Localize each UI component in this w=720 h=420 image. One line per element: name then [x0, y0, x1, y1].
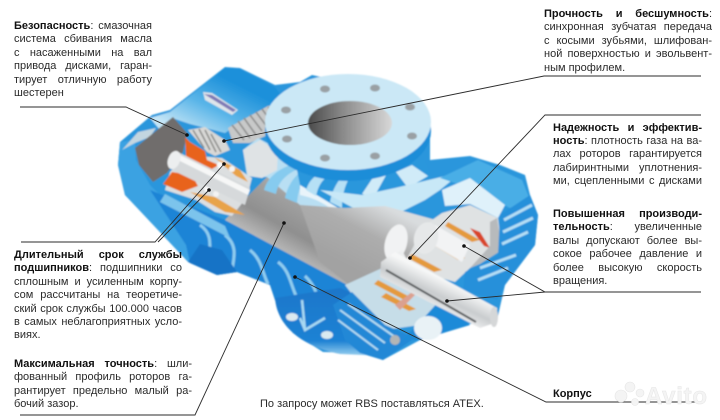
text: productivity: вращения. [553, 275, 607, 287]
text: reliability: ми, сцепленными с дисками [553, 175, 702, 187]
top flange face [265, 74, 431, 170]
text: safety [14, 20, 152, 99]
flange bolts [281, 84, 417, 162]
output shaft [380, 252, 498, 328]
rotor end caps [380, 219, 442, 276]
text: bearing life: в самых неблагоприятных усло- [14, 316, 182, 328]
text: maximum precision [14, 358, 192, 410]
watermark: Avito: Avito [645, 383, 707, 410]
text: bearing life [14, 249, 182, 341]
text: strength and silence: ной поверхностью и эвольвент- [544, 48, 712, 60]
left shaft [165, 149, 250, 205]
text: strength and silence: ным профилем. [544, 62, 625, 74]
text: reliability: лабиринтными уплотнения- [553, 162, 702, 174]
text: bearing life: сплошным и усиленным корпу- [14, 276, 182, 288]
text: bearing life: сом рассчитаны на теоретиче- [14, 289, 182, 301]
text: housing label: Корпус [553, 388, 592, 400]
text: productivity: более высокую скорость [553, 262, 702, 274]
text: strength and silence: синхронная зубчатая передача [544, 21, 712, 33]
text: reliability [553, 122, 702, 187]
left end gray wall [135, 117, 187, 182]
right fins [463, 195, 538, 300]
flange ribs [295, 160, 433, 212]
text: maximum precision: Максимальная точность: шли- [14, 358, 192, 370]
second rotor cylinder [300, 205, 443, 288]
text: maximum precision: бочий зазор. [14, 398, 79, 410]
text: strength and silence [544, 8, 712, 74]
text: safety: тирует отличную работу [14, 74, 152, 86]
lower front block [333, 292, 415, 360]
left end blue rim [118, 140, 240, 262]
lower left housing ribs [150, 190, 375, 350]
text: productivity: Повышенная производи- [553, 208, 702, 220]
text: reliability: ность: плотность газа на ва- [553, 135, 702, 147]
text: safety: привода дисками, гаран- [14, 60, 152, 72]
text: footnote: По запросу может RBS поставляться ATEX. [260, 398, 484, 410]
right bearing cavity [405, 205, 502, 282]
text: productivity: сокое рабочее давление и [553, 248, 702, 260]
text: maximum precision: рантирует предельно малый ра- [14, 385, 192, 397]
text: reliability: Надежность и эффектив- [553, 122, 702, 134]
text: productivity [553, 208, 702, 287]
text: strength and silence: Прочность и бесшумность: [544, 8, 712, 20]
text: bearing life: Длительный срок службы [14, 249, 182, 261]
right top housing plate [320, 160, 530, 218]
left bearing cutaway [163, 137, 252, 216]
large helical gear [228, 104, 286, 143]
text: safety: шестерен [14, 87, 64, 99]
nameplate [203, 92, 238, 115]
text: maximum precision: фованный профиль роторов га- [14, 371, 192, 383]
blower housing silhouette [118, 67, 538, 360]
text: reliability: лах роторов гарантируется [553, 148, 702, 160]
lower bearing cutaway [345, 268, 440, 330]
lower foot flange [275, 288, 395, 356]
text: productivity: тельность: увеличенные [553, 221, 702, 233]
text: safety: система сбивания масла [14, 33, 152, 45]
text: safety: Безопасность: смазочная [14, 20, 152, 32]
blue lower right housing [402, 300, 470, 340]
text: strength and silence: с косыми зубьями, шлифован- [544, 35, 712, 47]
flange bore [308, 101, 392, 145]
text: productivity: валы допускают более вы- [553, 235, 702, 247]
text: bearing life: ский срок службы 100.000 часов [14, 303, 182, 315]
text: bearing life: подшипников: подшипники со [14, 262, 182, 274]
upper housing [243, 138, 362, 222]
gear cover [150, 68, 285, 133]
top flange rim [265, 81, 431, 181]
text: safety: с насаженными на вал [14, 47, 152, 59]
text: bearing life: виях. [14, 329, 41, 341]
main rotor cylinder [225, 177, 420, 292]
small gear [188, 127, 230, 156]
